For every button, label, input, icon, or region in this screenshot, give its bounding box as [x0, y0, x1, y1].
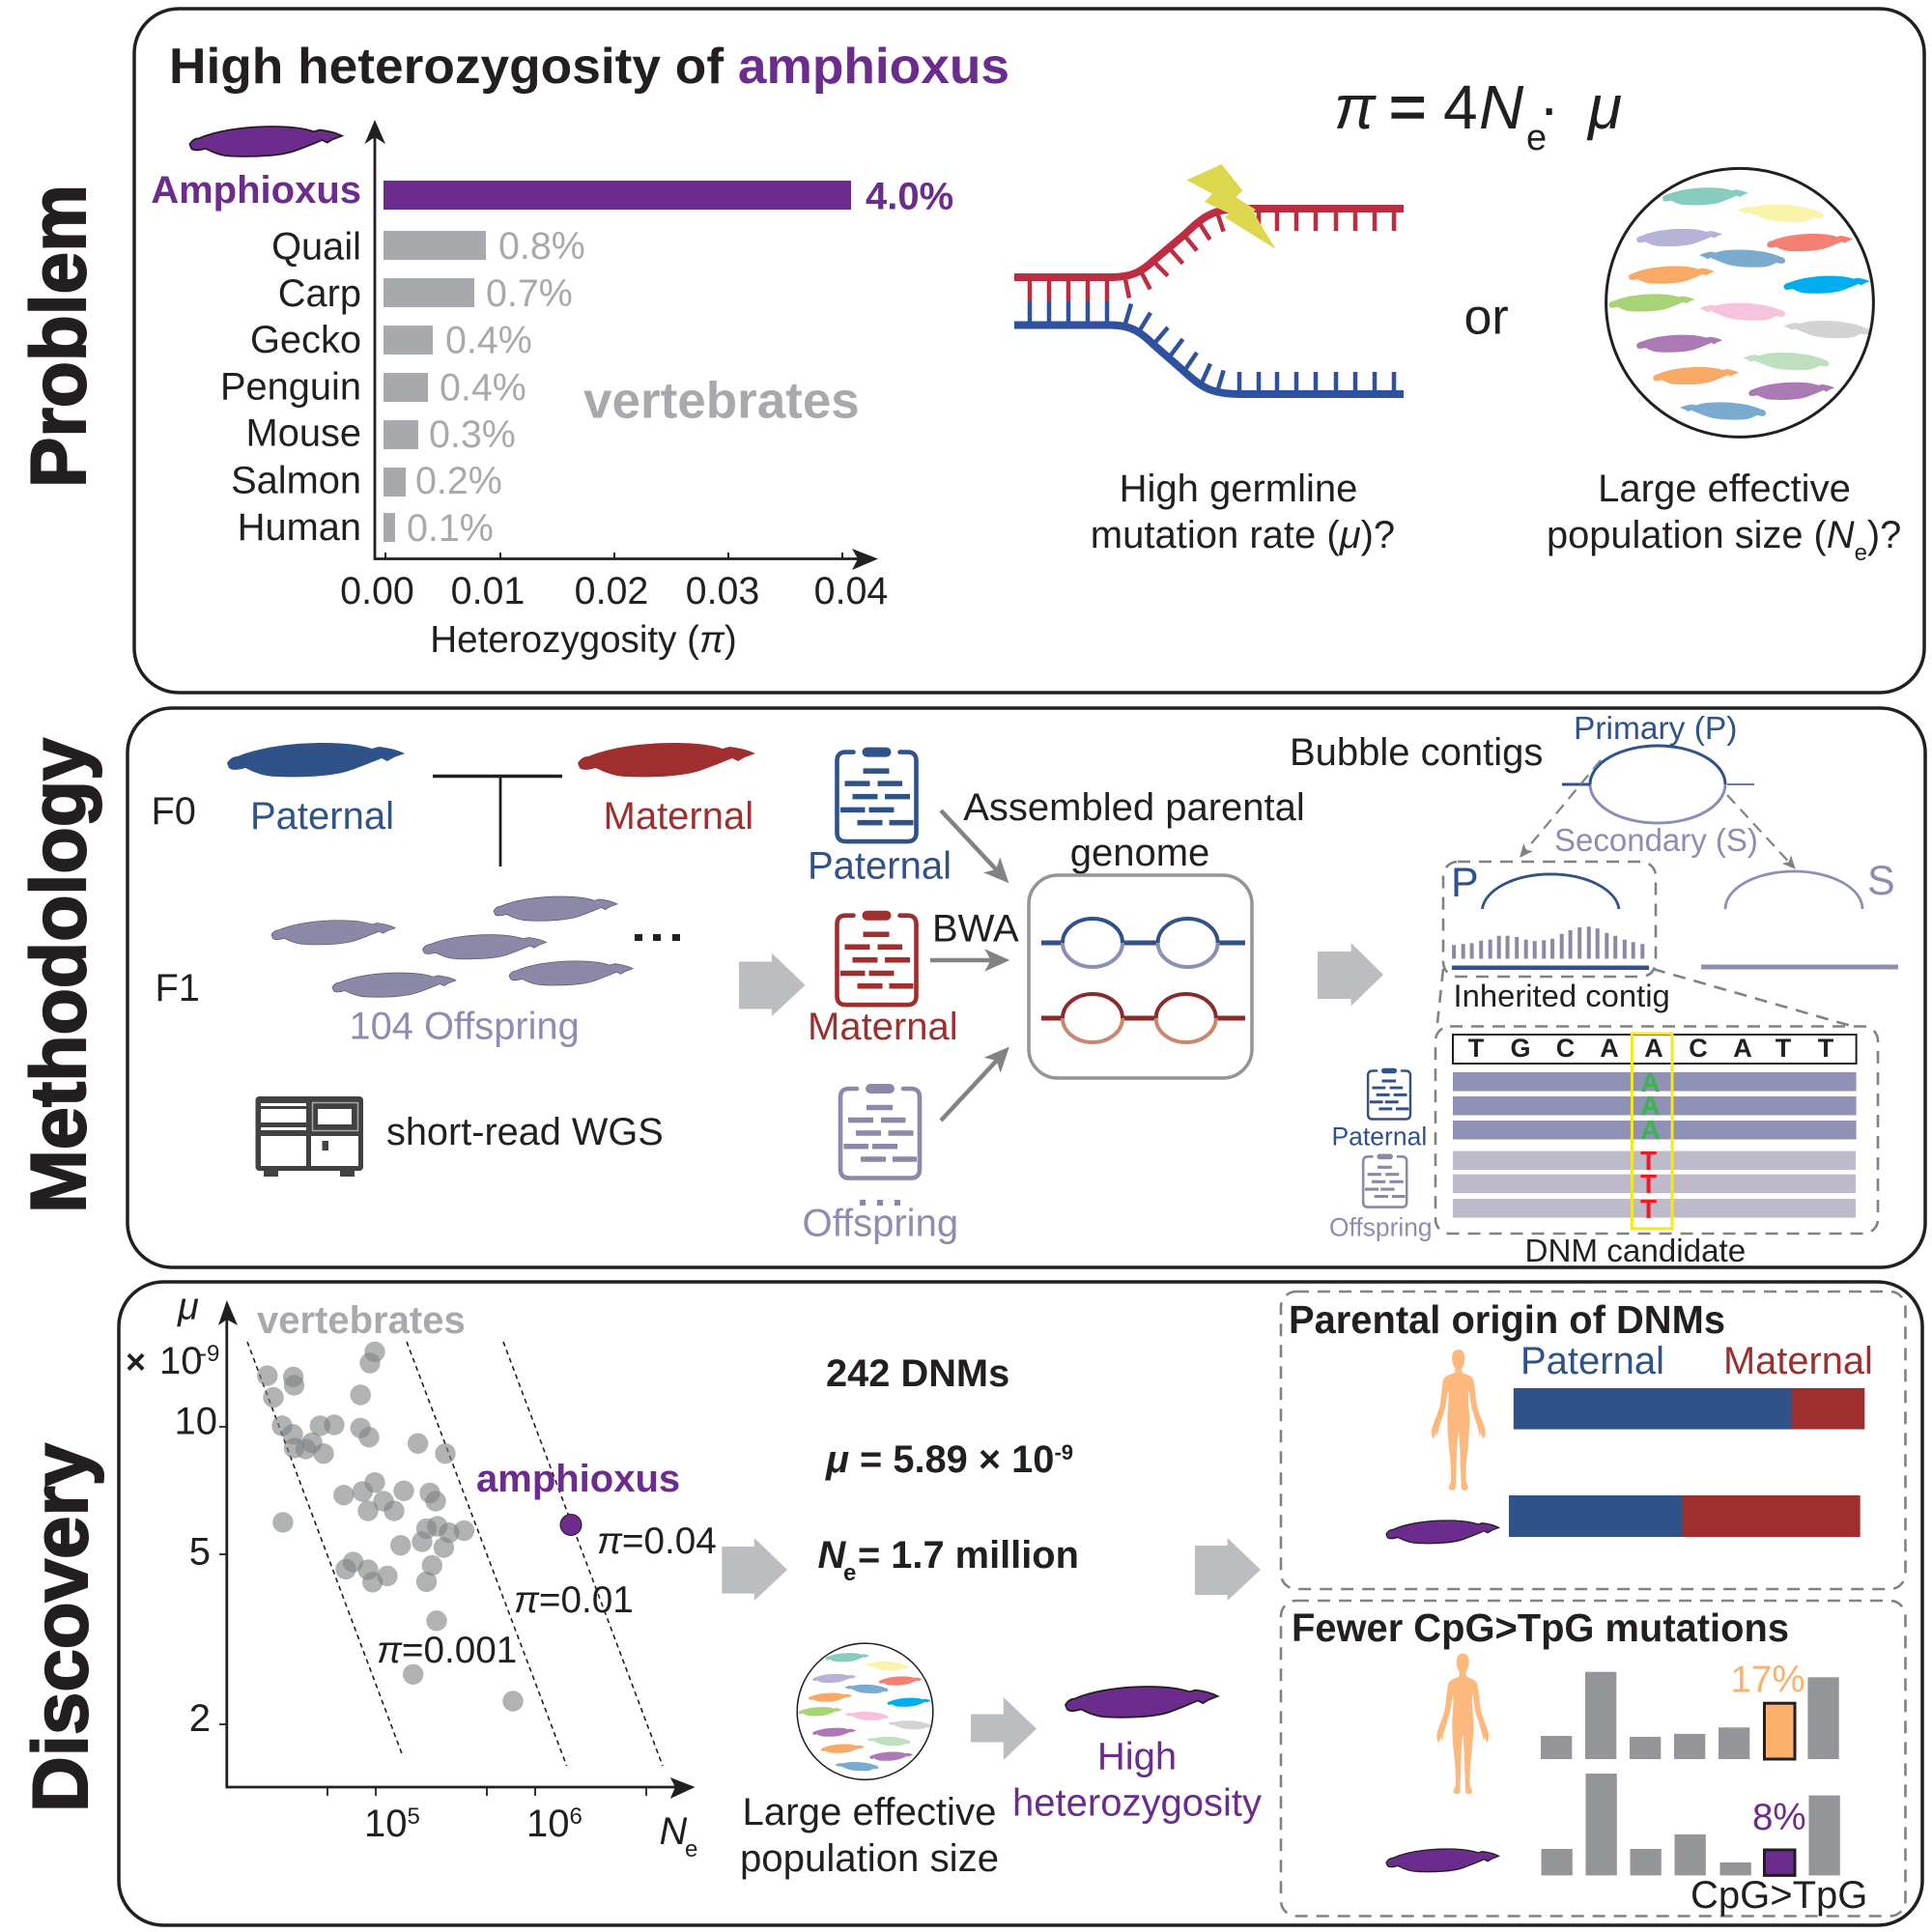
- heading: Methodology: Methodology: [15, 738, 102, 1213]
- bar chart: heterozygosity: 0.8%: [498, 225, 585, 268]
- DNM candidate alignment: T: [1468, 1034, 1485, 1063]
- bar chart: heterozygosity: 0.04: [814, 570, 888, 612]
- DNM candidate alignment: A: [1733, 1034, 1752, 1063]
- bar chart: heterozygosity: Quail: [271, 226, 361, 269]
- offspring group: F1: [155, 967, 200, 1009]
- panel: parental origin of DNMs: Maternal: [1723, 1340, 1873, 1382]
- DNM candidate alignment: C: [1556, 1034, 1575, 1063]
- text: or: or: [1464, 290, 1509, 346]
- icon: amphioxus: [189, 127, 342, 156]
- text: key results: e: [843, 1560, 856, 1586]
- scatter plot: mutation rate vs effective population size: 5: [408, 1804, 420, 1830]
- bar chart: heterozygosity: 0.4%: [445, 319, 532, 361]
- bar chart: heterozygosity: 0.2%: [415, 460, 502, 502]
- bar chart: heterozygosity: 4.0%: [866, 176, 953, 218]
- scatter plot: mutation rate vs effective population size: e: [685, 1836, 697, 1862]
- scatter plot: mutation rate vs effective population size: [126, 1285, 717, 1862]
- panel: parental origin of DNMs: Parental origin of DNMs: [1289, 1297, 1725, 1342]
- paternal and maternal parents: [151, 743, 755, 867]
- bar chart: heterozygosity: 0.01: [451, 570, 525, 612]
- panel: methodology: [128, 708, 1925, 1269]
- formula: π: [1334, 72, 1377, 142]
- text: high heterozygosity: heterozygosity: [1012, 1781, 1262, 1824]
- bar chart: heterozygosity: Heterozygosity (π): [430, 619, 737, 661]
- formula: ·: [1539, 72, 1559, 142]
- DNM candidate alignment: A: [1640, 1115, 1661, 1145]
- scatter plot: mutation rate vs effective population size: π=0.001: [377, 1630, 517, 1671]
- text: assembled parental genome: genome: [1070, 832, 1209, 874]
- DNM candidate alignment: A: [1640, 1091, 1661, 1121]
- title: High heterozygosity of amphioxus: [169, 39, 1009, 95]
- heading: Problem: Problem: [15, 185, 102, 488]
- panel: fewer CpG>TpG mutations: 17%: [1731, 1660, 1805, 1700]
- text: key results: μ = 5.89 × 10: [826, 1438, 1054, 1481]
- bar chart: heterozygosity: 0.3%: [429, 413, 516, 456]
- DNM candidate alignment: A: [1640, 1067, 1661, 1097]
- caption: population size: [1547, 468, 1901, 566]
- text: high heterozygosity: High: [1097, 1735, 1177, 1777]
- text: key results: -9: [1054, 1440, 1073, 1464]
- formula: N: [1479, 72, 1524, 142]
- bubble diagram: S: [1867, 858, 1895, 904]
- formula: 4: [1443, 72, 1478, 142]
- panel: fewer CpG>TpG mutations: CpG>TpG: [1690, 1874, 1867, 1917]
- bubble diagram: [1443, 711, 1898, 977]
- heading: Discovery: Discovery: [17, 1443, 104, 1812]
- scatter plot: mutation rate vs effective population size: vertebrates: [257, 1299, 466, 1342]
- bubble diagram: Primary (P): [1574, 711, 1737, 747]
- formula: [1334, 71, 1622, 158]
- panel: fewer CpG>TpG mutations: [1281, 1601, 1905, 1917]
- text: key results: N: [817, 1534, 846, 1577]
- text: assembled parental genome: Assembled parental: [963, 786, 1305, 829]
- paternal and maternal parents: Paternal: [250, 795, 394, 838]
- formula: μ: [1586, 72, 1622, 142]
- assemblies: Paternal: [808, 844, 952, 887]
- assembled genome box: [1029, 875, 1252, 1078]
- panel: fewer CpG>TpG mutations: 8%: [1752, 1797, 1806, 1838]
- bar chart: heterozygosity: Carp: [278, 272, 361, 315]
- text: large effective population size: population size: [740, 1836, 999, 1880]
- scatter plot: mutation rate vs effective population size: π=0.04: [597, 1520, 717, 1562]
- caption: population size: Large effective: [1598, 468, 1851, 510]
- panel: parental origin of DNMs: Paternal: [1520, 1340, 1664, 1382]
- DNM candidate alignment: A: [1600, 1034, 1619, 1063]
- scatter plot: mutation rate vs effective population size: amphioxus: [476, 1458, 680, 1500]
- caption: population size: )?: [1867, 514, 1901, 556]
- bubble diagram: Secondary (S): [1554, 822, 1758, 858]
- bar chart: heterozygosity: Gecko: [250, 319, 361, 361]
- bar chart: heterozygosity: Human: [238, 506, 361, 549]
- assemblies: Maternal: [808, 1006, 958, 1048]
- DNM candidate alignment: T: [1776, 1034, 1792, 1063]
- icon: DNA strands with mutation: [1014, 164, 1404, 394]
- arrow: to high heterozygosity: [971, 1697, 1037, 1760]
- bar chart: heterozygosity: 0.03: [686, 570, 759, 612]
- text: BWA: BWA: [932, 908, 1019, 951]
- DNM candidate alignment: T: [1640, 1169, 1657, 1199]
- text: key results: [817, 1352, 1079, 1586]
- text: short-read WGS: short-read WGS: [386, 1111, 664, 1153]
- scatter plot: mutation rate vs effective population size: μ: [177, 1285, 199, 1327]
- caption: population size: e: [1855, 540, 1867, 566]
- panel: parental origin of DNMs: [1281, 1292, 1905, 1589]
- icon: population circle: [1606, 168, 1873, 437]
- bar chart: heterozygosity: Salmon: [231, 460, 361, 502]
- panel: problem: [134, 9, 1924, 693]
- scatter plot: mutation rate vs effective population size: 5: [189, 1530, 211, 1573]
- scatter plot: mutation rate vs effective population size: -9: [199, 1341, 219, 1367]
- text: key results: = 1.7 million: [858, 1534, 1079, 1577]
- scatter plot: mutation rate vs effective population size: 10: [174, 1401, 217, 1443]
- caption: mutation rate: mutation rate (μ)?: [1091, 514, 1395, 556]
- arrow: to assemblies: [739, 953, 806, 1016]
- bar chart: heterozygosity: 0.7%: [486, 272, 573, 315]
- bar chart: heterozygosity: 0.02: [575, 570, 648, 612]
- icon: small population circle: [797, 1643, 933, 1779]
- scatter plot: mutation rate vs effective population size: 6: [570, 1804, 582, 1830]
- DNM candidate alignment: T: [1640, 1194, 1657, 1224]
- scatter plot: mutation rate vs effective population size: ×: [126, 1342, 146, 1381]
- bar chart: heterozygosity: Mouse: [246, 412, 361, 454]
- DNM candidate alignment: [1329, 969, 1878, 1269]
- scatter plot: mutation rate vs effective population size: 2: [189, 1697, 211, 1740]
- DNM candidate alignment: G: [1510, 1034, 1531, 1063]
- arrow: to results: [722, 1538, 787, 1601]
- DNM candidate alignment: T: [1818, 1034, 1834, 1063]
- scatter plot: mutation rate vs effective population size: N: [659, 1810, 688, 1853]
- text: large effective population size: Large effective: [743, 1790, 996, 1833]
- bar chart: heterozygosity: vertebrates: [583, 373, 860, 429]
- bubble diagram: P: [1451, 860, 1479, 906]
- text: key results: 242 DNMs: [826, 1352, 1009, 1395]
- paternal and maternal parents: F0: [151, 790, 196, 833]
- DNM candidate alignment: DNM candidate: [1524, 1234, 1746, 1269]
- assemblies: [802, 748, 958, 1244]
- DNM candidate alignment: Paternal: [1331, 1122, 1427, 1151]
- text: bubble contigs: Bubble contigs: [1290, 731, 1543, 774]
- caption: mutation rate: High germline: [1120, 468, 1357, 510]
- bar chart: heterozygosity: 0.00: [340, 570, 414, 612]
- DNM candidate alignment: T: [1640, 1146, 1657, 1176]
- offspring group: 104 Offspring: [350, 1005, 580, 1047]
- icon: sequencer: [255, 1096, 363, 1177]
- bar chart: heterozygosity: [151, 120, 953, 661]
- formula: e: [1526, 118, 1547, 158]
- formula: =: [1389, 71, 1427, 142]
- DNM candidate alignment: Offspring: [1329, 1213, 1433, 1242]
- scatter plot: mutation rate vs effective population size: π=0.01: [514, 1579, 634, 1621]
- bar chart: heterozygosity: Amphioxus: [151, 169, 361, 212]
- panel: discovery: [119, 1282, 1922, 1925]
- arrows: mapping: [930, 810, 997, 1121]
- icon: amphioxus large: [1065, 1687, 1218, 1718]
- bar chart: heterozygosity: 0.1%: [407, 507, 494, 550]
- scatter plot: mutation rate vs effective population size: 10: [159, 1340, 203, 1382]
- scatter plot: mutation rate vs effective population size: 10: [526, 1803, 570, 1845]
- arrow: to bubble contigs: [1318, 943, 1383, 1007]
- scatter plot: mutation rate vs effective population size: 10: [364, 1803, 408, 1845]
- caption: population size: population size (N: [1547, 514, 1855, 556]
- bar chart: heterozygosity: Penguin: [220, 365, 361, 408]
- offspring group: [155, 896, 680, 1047]
- paternal and maternal parents: Maternal: [603, 795, 753, 838]
- panel: fewer CpG>TpG mutations: Fewer CpG>TpG mutations: [1292, 1605, 1789, 1650]
- arrow: to insights: [1195, 1538, 1261, 1601]
- DNM candidate alignment: A: [1644, 1034, 1663, 1063]
- assemblies: Offspring: [802, 1202, 958, 1244]
- text: inherited contig: Inherited contig: [1453, 978, 1670, 1013]
- DNM candidate alignment: C: [1689, 1034, 1708, 1063]
- bar chart: heterozygosity: 0.4%: [440, 367, 526, 410]
